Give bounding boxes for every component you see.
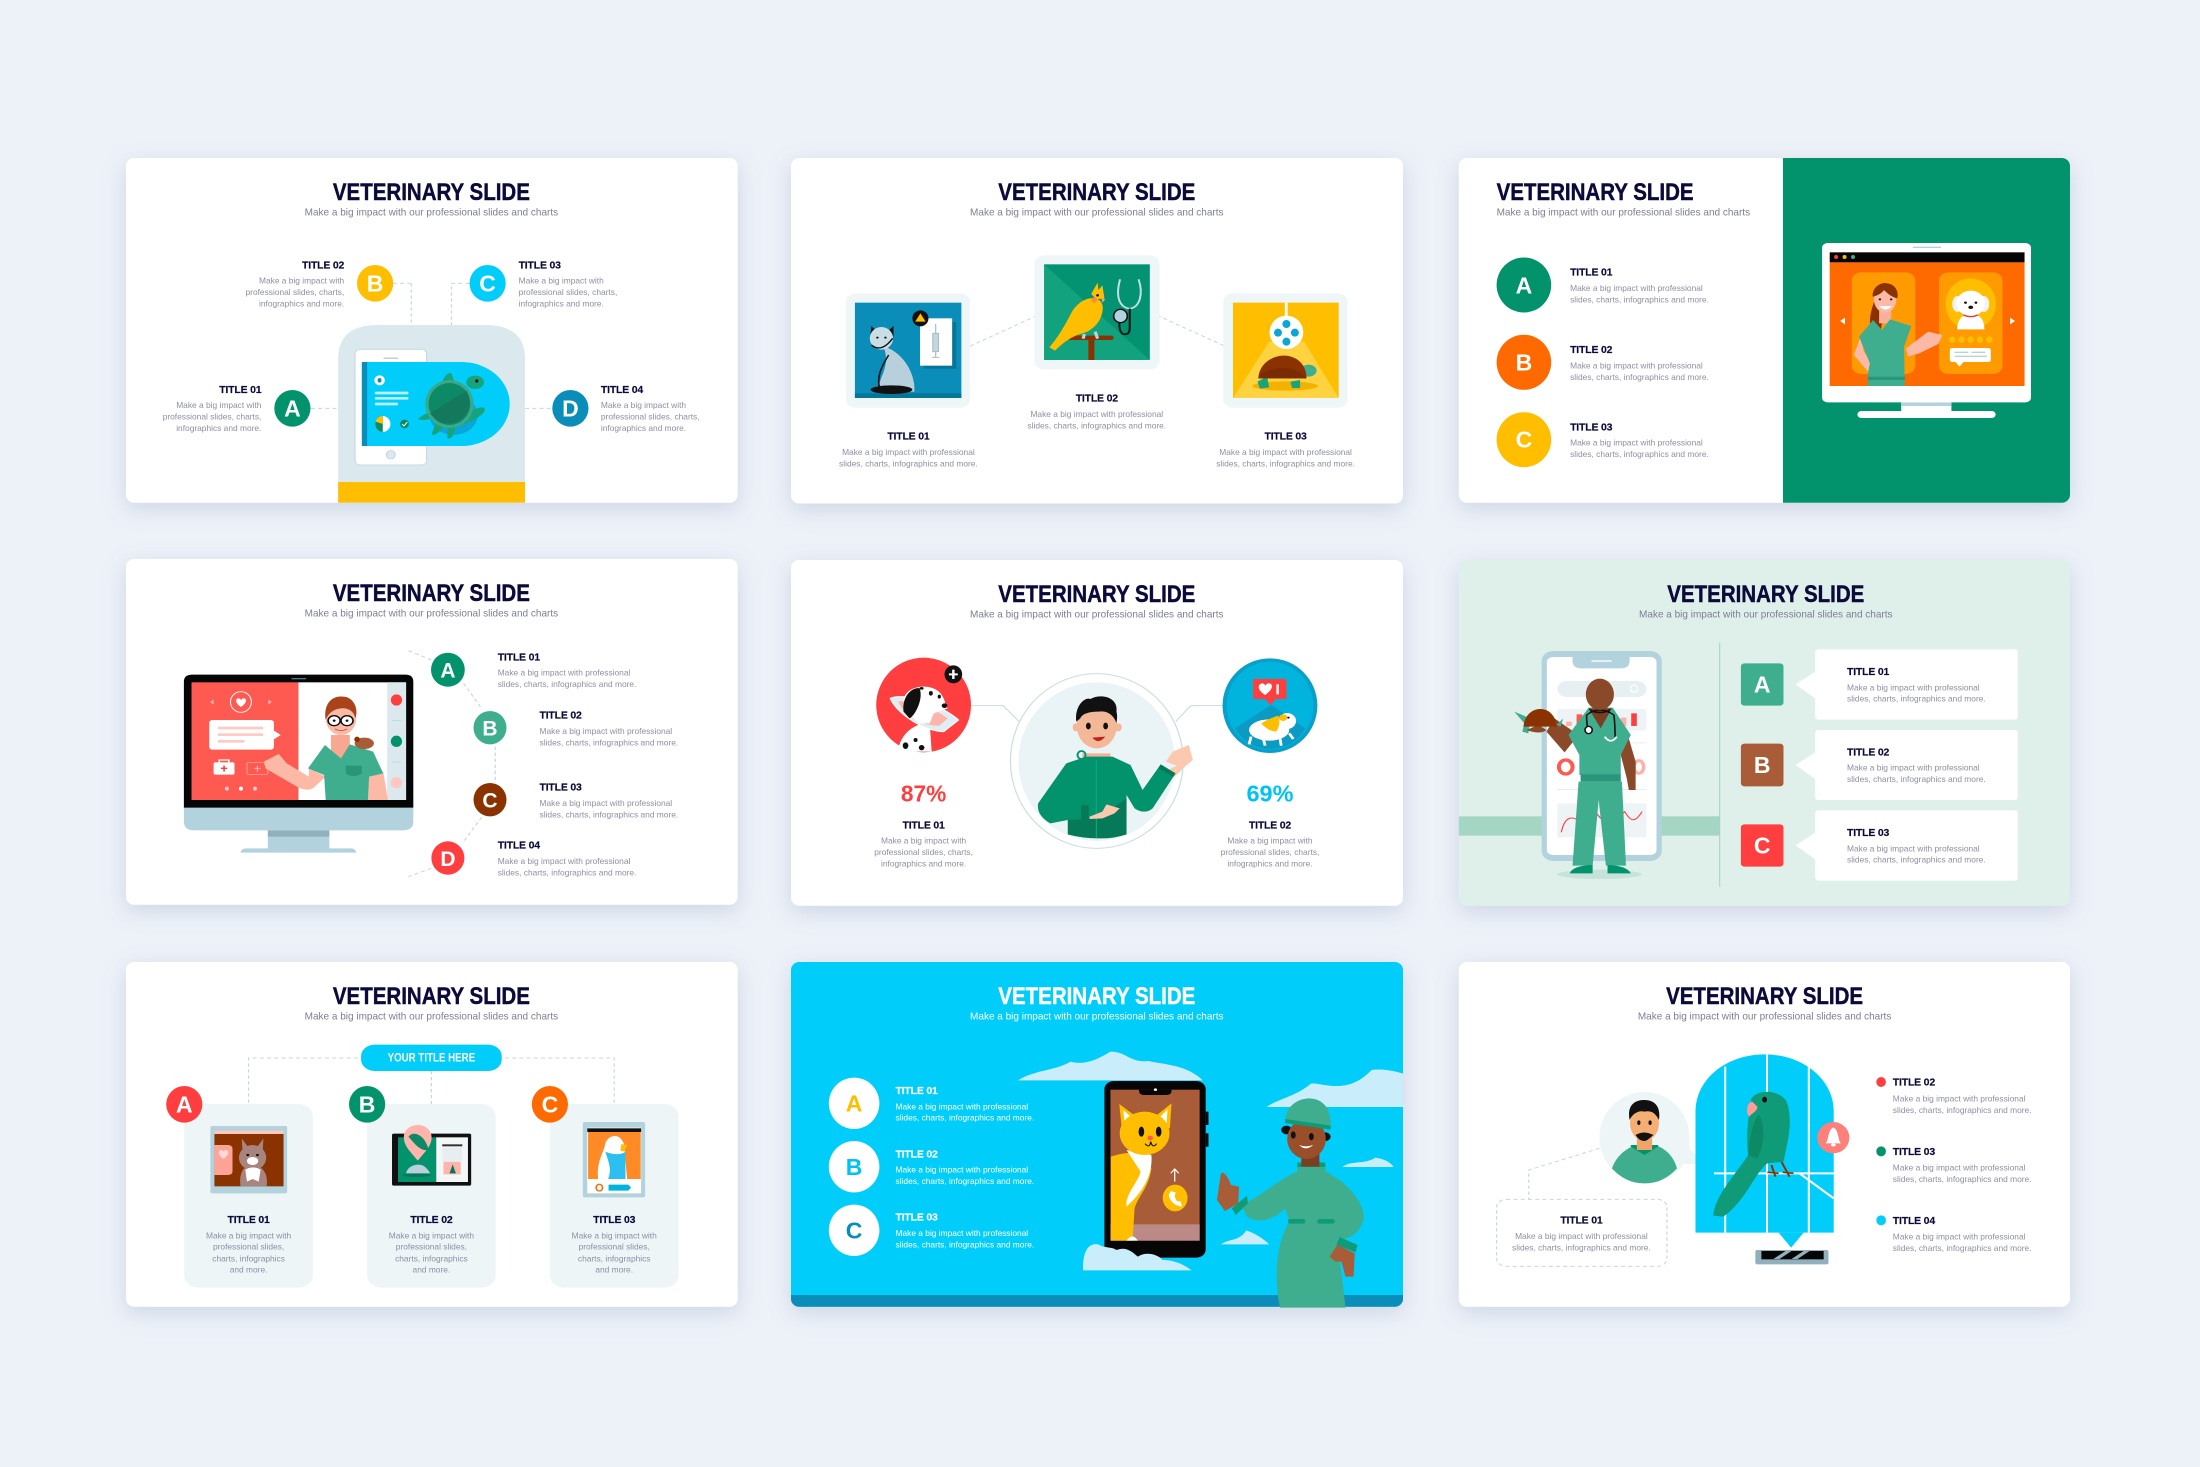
item C: TITLE 03 — [1570, 421, 1613, 433]
item A: Make a big impact with professional — [498, 668, 631, 678]
card B: professional slides, — [396, 1242, 467, 1252]
item B — [1754, 746, 1986, 784]
item 02: TITLE 02 — [1076, 392, 1118, 404]
item A: A — [846, 1091, 862, 1117]
illustration: vet with turtle and phone — [1459, 643, 2018, 887]
item B: TITLE 02 — [1570, 344, 1613, 356]
item C: infographics and more. — [519, 298, 604, 308]
item B: Make a big impact with professional — [540, 726, 672, 736]
heading: VETERINARY SLIDE — [1667, 581, 1864, 608]
item 02 — [1027, 392, 1166, 430]
item 03: Make a big impact with professional — [1893, 1163, 2026, 1173]
item C: C — [482, 790, 498, 812]
item 04: Make a big impact with professional — [1893, 1232, 2026, 1242]
illustration: monitor with vet and dog — [1822, 243, 2031, 418]
card A: TITLE 01 — [228, 1214, 270, 1226]
panel: slide 7 three cards — [126, 962, 738, 1307]
item 01 — [839, 430, 978, 469]
subtitle: Make a big impact with our professional slides and charts — [305, 207, 558, 219]
item D: infographics and more. — [601, 423, 686, 433]
item C: professional slides, charts, — [519, 287, 617, 297]
item 03: Make a big impact with professional — [1219, 447, 1352, 457]
item B — [474, 710, 678, 747]
item D: TITLE 04 — [601, 384, 643, 396]
item 01 — [1512, 1214, 1651, 1252]
item B: infographics and more. — [259, 298, 344, 308]
item C: Make a big impact with professional — [1570, 438, 1703, 448]
item B: TITLE 02 — [540, 710, 582, 722]
item D: Make a big impact with professional — [498, 856, 631, 866]
item B: B — [1754, 752, 1771, 778]
card B — [349, 1086, 474, 1275]
stat 87%: professional slides, charts, — [874, 847, 973, 857]
stat 69%: infographics and more. — [1227, 859, 1313, 869]
card A: professional slides, — [213, 1242, 284, 1252]
panel: slide 5 percentages — [791, 560, 1403, 906]
item A: TITLE 01 — [1847, 666, 1890, 678]
item A — [431, 651, 636, 689]
item 03 — [1893, 1146, 2032, 1184]
item 02: slides, charts, infographics and more. — [1027, 420, 1166, 430]
item A: infographics and more. — [176, 423, 261, 433]
stat 69%: 69% — [1246, 781, 1294, 807]
panel: slide 9 parrot — [1459, 962, 2070, 1307]
item 03: slides, charts, infographics and more. — [1893, 1174, 2032, 1184]
item A: slides, charts, infographics and more. — [896, 1113, 1034, 1123]
item C — [470, 259, 617, 308]
bottom band — [791, 1295, 1403, 1307]
item A — [163, 384, 310, 433]
card B: Make a big impact with — [389, 1230, 474, 1240]
card C: C — [542, 1092, 558, 1118]
item A: slides, charts, infographics and more. — [498, 679, 636, 689]
item A: professional slides, charts, — [163, 412, 261, 422]
item 01: Make a big impact with professional — [1515, 1231, 1648, 1241]
item 03 — [1216, 430, 1355, 469]
illustration: parrot in cage with vet bubble — [1497, 1054, 1886, 1266]
stat 87% — [874, 781, 973, 869]
item C: C — [1754, 832, 1771, 858]
item A: A — [1516, 272, 1532, 298]
item C: TITLE 03 — [540, 781, 582, 793]
item C: C — [1516, 427, 1532, 453]
illustration: tablet with turtle — [311, 283, 552, 503]
item 02: Make a big impact with professional — [1030, 409, 1163, 419]
item C: Make a big impact with — [519, 275, 604, 285]
illustration: vet, dog and hamster circles — [876, 658, 1317, 848]
item B: TITLE 02 — [1847, 746, 1890, 758]
item A: Make a big impact with professional — [1847, 682, 1980, 692]
heading: VETERINARY SLIDE — [333, 179, 530, 206]
card C: charts, infographics — [578, 1253, 651, 1263]
subtitle: Make a big impact with our professional slides and charts — [1639, 609, 1893, 621]
item C: slides, charts, infographics and more. — [896, 1240, 1034, 1250]
item A: slides, charts, infographics and more. — [1570, 294, 1709, 304]
item B — [246, 259, 393, 308]
item 01: slides, charts, infographics and more. — [839, 459, 978, 469]
item C: TITLE 03 — [896, 1212, 938, 1224]
subtitle: Make a big impact with our professional slides and charts — [1497, 207, 1750, 219]
item 02: Make a big impact with professional — [1893, 1094, 2026, 1104]
item B: Make a big impact with professional — [1570, 360, 1703, 370]
item B: professional slides, charts, — [246, 287, 344, 297]
card A: and more. — [230, 1265, 267, 1275]
stat 69%: Make a big impact with — [1227, 836, 1313, 846]
card B: TITLE 02 — [410, 1214, 453, 1226]
item 02 — [1893, 1077, 2032, 1115]
item B: slides, charts, infographics and more. — [896, 1176, 1034, 1186]
item D: professional slides, charts, — [601, 412, 700, 422]
item B — [829, 1141, 1034, 1192]
item C: C — [846, 1218, 862, 1244]
item A — [829, 1078, 1034, 1129]
item A: TITLE 01 — [498, 651, 540, 663]
heading: VETERINARY SLIDE — [998, 983, 1195, 1010]
card C: Make a big impact with — [572, 1230, 657, 1240]
item C: slides, charts, infographics and more. — [540, 809, 678, 819]
item A — [1754, 666, 1986, 704]
item 03: TITLE 03 — [1893, 1146, 1935, 1158]
stat 69%: professional slides, charts, — [1221, 847, 1319, 857]
item B: B — [367, 271, 383, 297]
item B — [1497, 335, 1709, 390]
item 03: TITLE 03 — [1265, 430, 1307, 442]
illustration: org tree and device cards — [184, 1045, 678, 1288]
item C: TITLE 03 — [519, 259, 561, 271]
item C: Make a big impact with professional — [540, 798, 672, 808]
item C — [474, 781, 678, 819]
subtitle: Make a big impact with our professional slides and charts — [970, 609, 1224, 621]
item 02: TITLE 02 — [1893, 1077, 1935, 1089]
panel: slide 1 tablet turtle — [126, 158, 738, 503]
panel: slide 8 cyan phone call — [791, 962, 1403, 1308]
item C: TITLE 03 — [1847, 827, 1890, 839]
card A — [166, 1086, 292, 1275]
item D: Make a big impact with — [601, 400, 686, 410]
subtitle: Make a big impact with our professional slides and charts — [1638, 1011, 1891, 1023]
subtitle: Make a big impact with our professional slides and charts — [970, 1011, 1224, 1023]
item B: B — [482, 718, 498, 740]
card A: Make a big impact with — [206, 1230, 292, 1240]
item A: TITLE 01 — [219, 384, 262, 396]
item B: TITLE 02 — [302, 259, 345, 271]
card A: charts, infographics — [212, 1253, 285, 1263]
item D — [552, 384, 700, 433]
item A: Make a big impact with professional — [896, 1101, 1028, 1111]
item 01: slides, charts, infographics and more. — [1512, 1242, 1651, 1252]
heading: VETERINARY SLIDE — [1497, 179, 1694, 206]
item 04: slides, charts, infographics and more. — [1893, 1243, 2032, 1253]
stat 87%: 87% — [901, 781, 946, 807]
stat 69%: TITLE 02 — [1249, 820, 1291, 832]
illustration: desktop monitor with vet — [184, 651, 495, 877]
subtitle: Make a big impact with our professional slides and charts — [970, 207, 1224, 219]
item 03: slides, charts, infographics and more. — [1216, 459, 1355, 469]
item C: slides, charts, infographics and more. — [1847, 855, 1986, 865]
item C — [1497, 412, 1709, 467]
item C: Make a big impact with professional — [896, 1228, 1028, 1238]
item A: Make a big impact with — [176, 400, 262, 410]
heading: VETERINARY SLIDE — [1666, 983, 1863, 1010]
item B: Make a big impact with professional — [896, 1165, 1028, 1175]
heading: VETERINARY SLIDE — [333, 580, 530, 607]
card B: B — [359, 1092, 375, 1118]
heading: VETERINARY SLIDE — [333, 983, 530, 1010]
item B: Make a big impact with professional — [1847, 763, 1980, 773]
stat 87%: infographics and more. — [881, 859, 966, 869]
card A: A — [176, 1092, 193, 1118]
card C: TITLE 03 — [593, 1214, 636, 1226]
green side panel — [1783, 158, 2070, 503]
item B: B — [1516, 349, 1532, 375]
title pill label: YOUR TITLE HERE — [388, 1053, 475, 1065]
item A: A — [440, 660, 455, 682]
stat 87%: TITLE 01 — [903, 820, 945, 832]
item D: TITLE 04 — [498, 840, 540, 852]
item C — [829, 1205, 1034, 1256]
item C — [1754, 827, 1986, 865]
item A: A — [1754, 672, 1771, 698]
item B: slides, charts, infographics and more. — [540, 737, 678, 747]
stat 69% — [1221, 781, 1319, 869]
panel: slide 3 monitor on green — [1459, 158, 2070, 503]
panel: slide 2 three pet pictures — [791, 158, 1403, 504]
illustration: phone, cat and vet — [1018, 1052, 1403, 1308]
card B: charts, infographics — [395, 1253, 468, 1263]
card C: and more. — [595, 1265, 633, 1275]
item A: TITLE 01 — [896, 1085, 938, 1097]
item 02: slides, charts, infographics and more. — [1893, 1105, 2032, 1115]
card B: and more. — [413, 1265, 450, 1275]
item D: D — [562, 396, 579, 422]
card C — [532, 1086, 657, 1275]
item B: TITLE 02 — [896, 1148, 938, 1160]
item C: C — [479, 271, 496, 297]
item A: Make a big impact with professional — [1570, 283, 1703, 293]
item 04: TITLE 04 — [1893, 1215, 1935, 1227]
subtitle: Make a big impact with our professional slides and charts — [305, 1011, 558, 1023]
item D: slides, charts, infographics and more. — [498, 867, 636, 877]
stat 87%: Make a big impact with — [881, 836, 967, 846]
heading: VETERINARY SLIDE — [998, 179, 1195, 206]
illustration: cat, bird and turtle frames — [846, 255, 1348, 408]
item B: B — [846, 1154, 862, 1180]
item A: A — [284, 396, 301, 422]
item A — [1497, 258, 1709, 312]
item D — [431, 840, 636, 877]
heading: VETERINARY SLIDE — [998, 581, 1195, 608]
item 01: Make a big impact with professional — [842, 447, 975, 457]
subtitle: Make a big impact with our professional slides and charts — [305, 608, 558, 620]
item C: Make a big impact with professional — [1847, 843, 1980, 853]
card C: professional slides, — [579, 1242, 650, 1252]
item B: slides, charts, infographics and more. — [1570, 372, 1709, 382]
item 01: TITLE 01 — [887, 430, 930, 442]
item A: slides, charts, infographics and more. — [1847, 694, 1986, 704]
panel: slide 6 mint phone vet — [1459, 560, 2070, 906]
item C: slides, charts, infographics and more. — [1570, 449, 1709, 459]
panel: slide 4 desktop vet — [126, 559, 738, 905]
item D: D — [440, 848, 455, 871]
item 04 — [1893, 1215, 2032, 1253]
item 01: TITLE 01 — [1560, 1214, 1603, 1226]
item B: Make a big impact with — [259, 275, 345, 285]
item A: TITLE 01 — [1570, 267, 1613, 279]
item B: slides, charts, infographics and more. — [1847, 774, 1986, 784]
